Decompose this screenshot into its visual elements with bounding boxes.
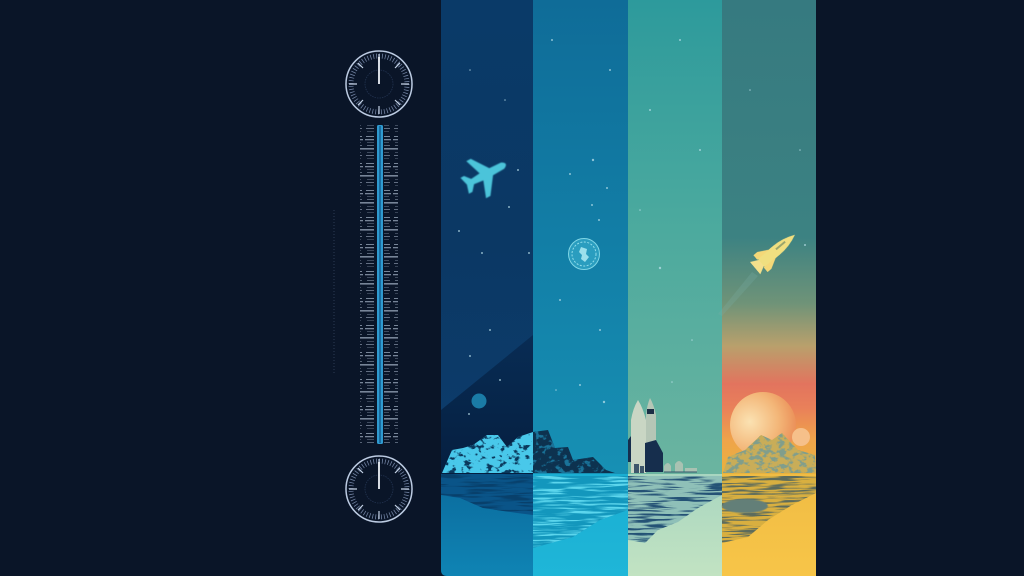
altitude scale ticks [360, 125, 398, 443]
water [533, 474, 628, 576]
water ripples [722, 476, 816, 543]
icon: airplane [455, 145, 516, 204]
dark mountains [533, 430, 615, 473]
dial: bottom gauge [346, 456, 412, 522]
major dial ticks [349, 54, 409, 114]
reflection patch [722, 499, 768, 513]
golden mountains [723, 433, 816, 473]
water ripples [628, 476, 722, 543]
mountains [442, 432, 533, 473]
water [628, 474, 722, 576]
faint dotted guide [333, 210, 335, 375]
dark diagonal night sky [441, 335, 533, 474]
stars [458, 39, 806, 415]
icon: satellite globe [568, 238, 600, 270]
dial: top gauge [346, 51, 412, 117]
altitude bar [377, 125, 383, 444]
column 2: satellite altitude [533, 0, 628, 576]
icon: rocket [748, 226, 802, 277]
rocket on launch pad [628, 398, 697, 473]
bottom needle [378, 462, 380, 489]
major bottom dial ticks [349, 459, 409, 519]
water ripples [533, 476, 628, 548]
column 1: airplane altitude [441, 0, 533, 576]
water reflection [441, 474, 533, 515]
small planet [792, 428, 810, 446]
water [722, 474, 816, 576]
needle [378, 57, 380, 84]
rocket exhaust trail [718, 272, 758, 316]
large planet [730, 392, 796, 458]
column 4: sunset planet [722, 0, 816, 576]
moon [472, 394, 486, 408]
water [441, 474, 533, 576]
column 3: launch [628, 0, 722, 576]
